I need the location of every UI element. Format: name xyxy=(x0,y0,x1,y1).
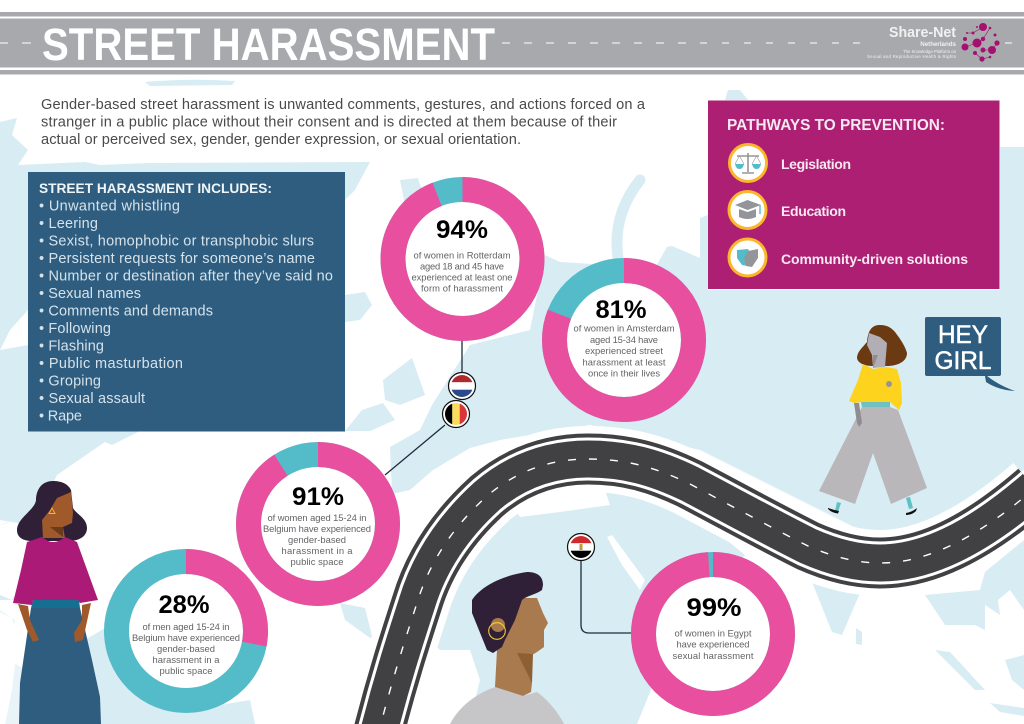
panel: street harassment includes: • Sexist, homophobic or transphobic slurs xyxy=(39,234,314,250)
connector lines xyxy=(385,341,632,633)
panel: street harassment includes: • Public masturbation xyxy=(39,356,183,372)
chart: 81 percent Amsterdam: aged 15-34 have xyxy=(590,334,658,345)
illustration: man with earring xyxy=(450,572,564,724)
map land gaps xyxy=(0,490,645,724)
chart: 28 percent men Belgium xyxy=(116,562,256,700)
chart: 28 percent men Belgium: public space xyxy=(160,665,212,676)
chart: 81 percent Amsterdam: 81% xyxy=(596,296,646,324)
chart: 94 percent Rotterdam: aged 18 and 45 have xyxy=(420,260,504,272)
panel: street harassment includes: • Rape xyxy=(39,408,82,424)
panel: street harassment includes: • Leering xyxy=(39,216,98,232)
illustration: woman in yellow top xyxy=(819,325,927,515)
chart: 94 percent Rotterdam: experienced at least one xyxy=(412,272,512,282)
chart: 91 percent women Belgium: harassment in a xyxy=(282,545,353,556)
speech bubble: hey girl: GIRL xyxy=(934,347,992,375)
chart: 28 percent men Belgium: Belgium have experienced xyxy=(132,632,240,643)
panel: street harassment includes: • Groping xyxy=(39,374,101,390)
chart: 94 percent Rotterdam: 94% xyxy=(436,216,488,244)
chart: 94 percent Rotterdam: form of harassment xyxy=(421,282,503,294)
panel: street harassment includes: • Number or destination after they’ve said no xyxy=(39,268,333,284)
panel: street harassment includes xyxy=(28,172,345,432)
title: STREET HARASSMENT xyxy=(42,20,495,71)
chart: 81 percent Amsterdam: of women in Amsterdam xyxy=(574,322,675,334)
chart: 99 percent Egypt: have experienced xyxy=(676,638,750,650)
panel: pathways to prevention: Community-driven solutions xyxy=(781,251,968,267)
chart: 91 percent women Belgium: gender-based xyxy=(288,534,346,545)
header road banner xyxy=(0,12,1024,74)
intro text: actual or perceived sex, gender, gender expression, or sexual orientation. xyxy=(41,132,521,148)
panel: pathways to prevention: Legislation xyxy=(781,156,851,172)
chart: 99 percent Egypt: sexual harassment xyxy=(672,650,754,661)
speech bubble: hey girl: HEY xyxy=(938,321,988,349)
chart: 81 percent Amsterdam: once in their lives xyxy=(588,368,660,378)
chart: 28 percent men Belgium: gender-based xyxy=(157,643,215,654)
panel: street harassment includes: STREET HARASSMENT INCLUDES: xyxy=(39,181,272,196)
chart: 91 percent women Belgium: of women aged 15-24 in xyxy=(268,512,366,523)
intro text xyxy=(41,97,646,148)
panel: street harassment includes: • Following xyxy=(39,321,111,337)
panel: pathways to prevention xyxy=(708,100,1000,289)
chart: 28 percent men Belgium: of men aged 15-24 in xyxy=(142,621,230,632)
logo: Share-Net Netherlands: The Knowledge Platform on xyxy=(903,49,957,54)
chart: 28 percent men Belgium: harassment in a xyxy=(152,654,220,665)
icon: Egypt flag xyxy=(568,534,594,560)
panel: street harassment includes: • Unwanted whistling xyxy=(39,198,180,214)
illustration: woman with magenta blouse xyxy=(13,481,101,724)
logo: Share-Net Netherlands xyxy=(867,23,1000,62)
panel: pathways to prevention: PATHWAYS TO PREVENTION: xyxy=(727,117,945,134)
panel: pathways to prevention: Education xyxy=(781,203,846,219)
logo: Share-Net Netherlands: Sexual and Reproductive Health & Rights xyxy=(867,54,956,59)
chart: 81 percent Amsterdam xyxy=(554,270,694,410)
icon: handshake xyxy=(729,239,766,276)
road xyxy=(378,459,1024,724)
panel: street harassment includes: • Sexual names xyxy=(39,286,141,302)
panel: street harassment includes: • Persistent requests for someone’s name xyxy=(39,251,315,267)
panel: street harassment includes: • Sexual assault xyxy=(39,391,145,407)
intro text: Gender-based street harassment is unwanted comments, gestures, and actions forced on a xyxy=(41,97,646,113)
intro text: stranger in a public place without their consent and is directed at them because of their xyxy=(41,114,617,130)
chart: 99 percent Egypt: of women in Egypt xyxy=(674,628,752,638)
chart: 28 percent men Belgium: 28% xyxy=(158,591,210,619)
chart: 94 percent Rotterdam: of women in Rotterdam xyxy=(414,250,511,260)
chart: 81 percent Amsterdam: experienced street xyxy=(585,345,663,356)
logo: Share-Net Netherlands: Share-Net xyxy=(889,25,956,41)
chart: 81 percent Amsterdam: harassment at least xyxy=(582,356,666,368)
icon: Belgium flag xyxy=(442,400,470,428)
icon: graduation cap xyxy=(729,192,766,228)
chart: 99 percent Egypt: 99% xyxy=(686,594,742,622)
panel: street harassment includes: • Flashing xyxy=(39,338,104,354)
icon: scales of justice xyxy=(730,144,766,182)
icon: Netherlands flag xyxy=(448,372,476,400)
chart: 91 percent women Belgium: 91% xyxy=(292,483,344,511)
chart: 94 percent Rotterdam xyxy=(393,190,532,328)
chart: 99 percent Egypt xyxy=(644,564,782,704)
chart: 91 percent women Belgium xyxy=(248,454,388,594)
logo: Share-Net Netherlands: Netherlands xyxy=(920,41,957,48)
chart: 91 percent women Belgium: public space xyxy=(290,556,344,567)
speech bubble: hey girl xyxy=(925,317,1015,391)
panel: street harassment includes: • Comments and demands xyxy=(39,304,213,320)
chart: 91 percent women Belgium: Belgium have experienced xyxy=(263,523,371,534)
